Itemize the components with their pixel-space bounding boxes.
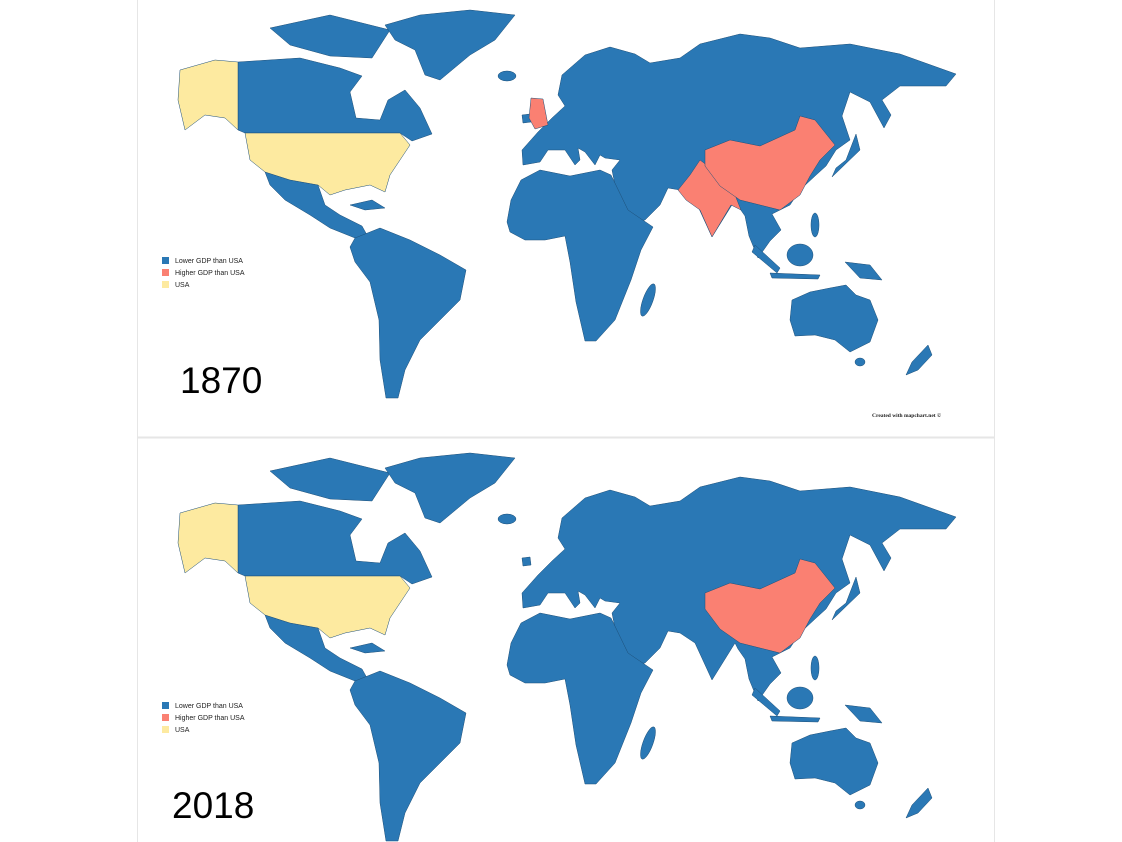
legend 1870 bbox=[162, 257, 245, 289]
legend 2018: USA bbox=[175, 727, 190, 734]
country: Alaska (USA) bbox=[178, 503, 238, 573]
legend 2018: Lower GDP than USA bbox=[175, 703, 243, 710]
country: China bbox=[705, 559, 835, 653]
country: India bbox=[678, 160, 741, 237]
legend 1870: Lower GDP than USA bbox=[175, 258, 243, 265]
country: Alaska (USA) bbox=[178, 60, 238, 130]
year label 1870: 1870 bbox=[180, 360, 262, 401]
country: China bbox=[705, 116, 835, 210]
panel: 2018 map bbox=[138, 438, 994, 842]
year label 2018: 2018 bbox=[172, 785, 254, 826]
panel: 1870 map bbox=[138, 0, 994, 437]
country: USA bbox=[245, 576, 410, 638]
legend 1870: USA bbox=[175, 282, 190, 289]
country: UK bbox=[529, 98, 548, 129]
map: world 2018 bbox=[178, 453, 956, 841]
legend 2018: Higher GDP than USA bbox=[175, 715, 245, 722]
country: USA bbox=[245, 133, 410, 195]
credit: Created with mapchart.net © bbox=[872, 412, 941, 419]
legend 1870: Higher GDP than USA bbox=[175, 270, 245, 277]
map: world 1870 bbox=[178, 10, 956, 398]
legend 2018 bbox=[162, 702, 245, 734]
